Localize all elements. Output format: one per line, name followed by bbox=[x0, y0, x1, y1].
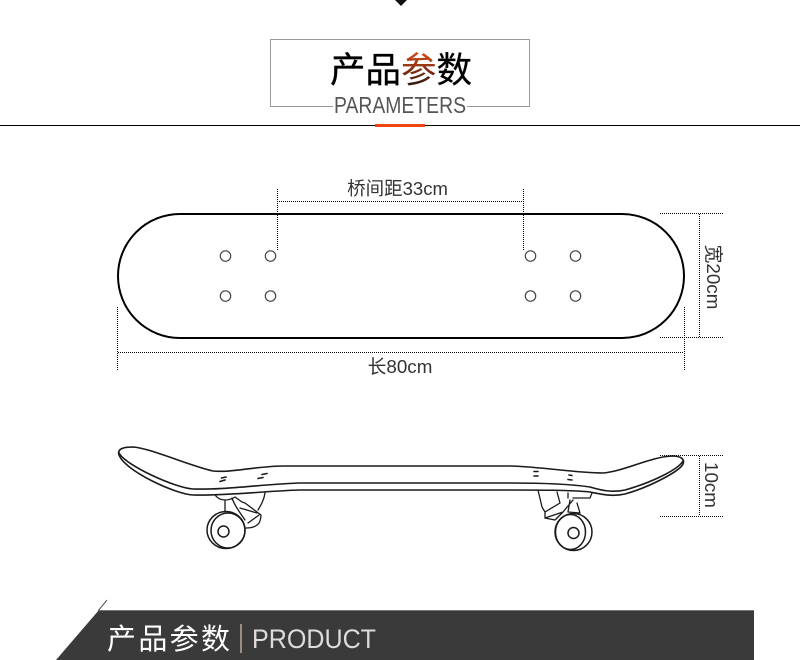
dimension: length 80cm: 长80cm bbox=[368, 356, 432, 377]
truck mounting holes bbox=[220, 251, 581, 301]
rear truck bbox=[538, 490, 592, 520]
front truck bbox=[215, 493, 265, 528]
banner heading: English: PRODUCT bbox=[252, 624, 376, 654]
banner top edge bbox=[99, 610, 754, 612]
grip bolts bbox=[220, 472, 572, 482]
rear wheel bbox=[555, 514, 592, 550]
dimension: height 10cm: 10cm bbox=[701, 462, 722, 508]
top view deck outline bbox=[118, 214, 684, 338]
dimension: width 20cm: 宽20cm bbox=[703, 245, 724, 309]
dimension: height 10cm bbox=[660, 456, 723, 516]
side view skateboard bbox=[119, 447, 684, 550]
orange accent bbox=[375, 124, 425, 127]
title block bbox=[270, 40, 530, 118]
deck bbox=[119, 447, 684, 495]
dimension: wheelbase 33cm: 桥间距33cm bbox=[347, 178, 448, 199]
banner background bbox=[56, 610, 754, 660]
banner heading: Chinese: 产品参数 bbox=[107, 623, 230, 656]
dimension: wheelbase 33cm bbox=[277, 178, 524, 251]
header rule bbox=[0, 125, 800, 126]
dimension: length 80cm bbox=[118, 307, 684, 377]
front wheel bbox=[207, 512, 245, 548]
dimension: width 20cm bbox=[660, 214, 724, 338]
banner divider bbox=[240, 624, 242, 653]
title frame bbox=[270, 40, 530, 106]
footer banner bbox=[56, 600, 754, 660]
title: Chinese: 产品参数 bbox=[330, 50, 472, 90]
banner slanted tick bbox=[98, 600, 107, 611]
title: English: PARAMETERS bbox=[334, 92, 466, 118]
icon: top diamond marker bbox=[395, 0, 407, 6]
